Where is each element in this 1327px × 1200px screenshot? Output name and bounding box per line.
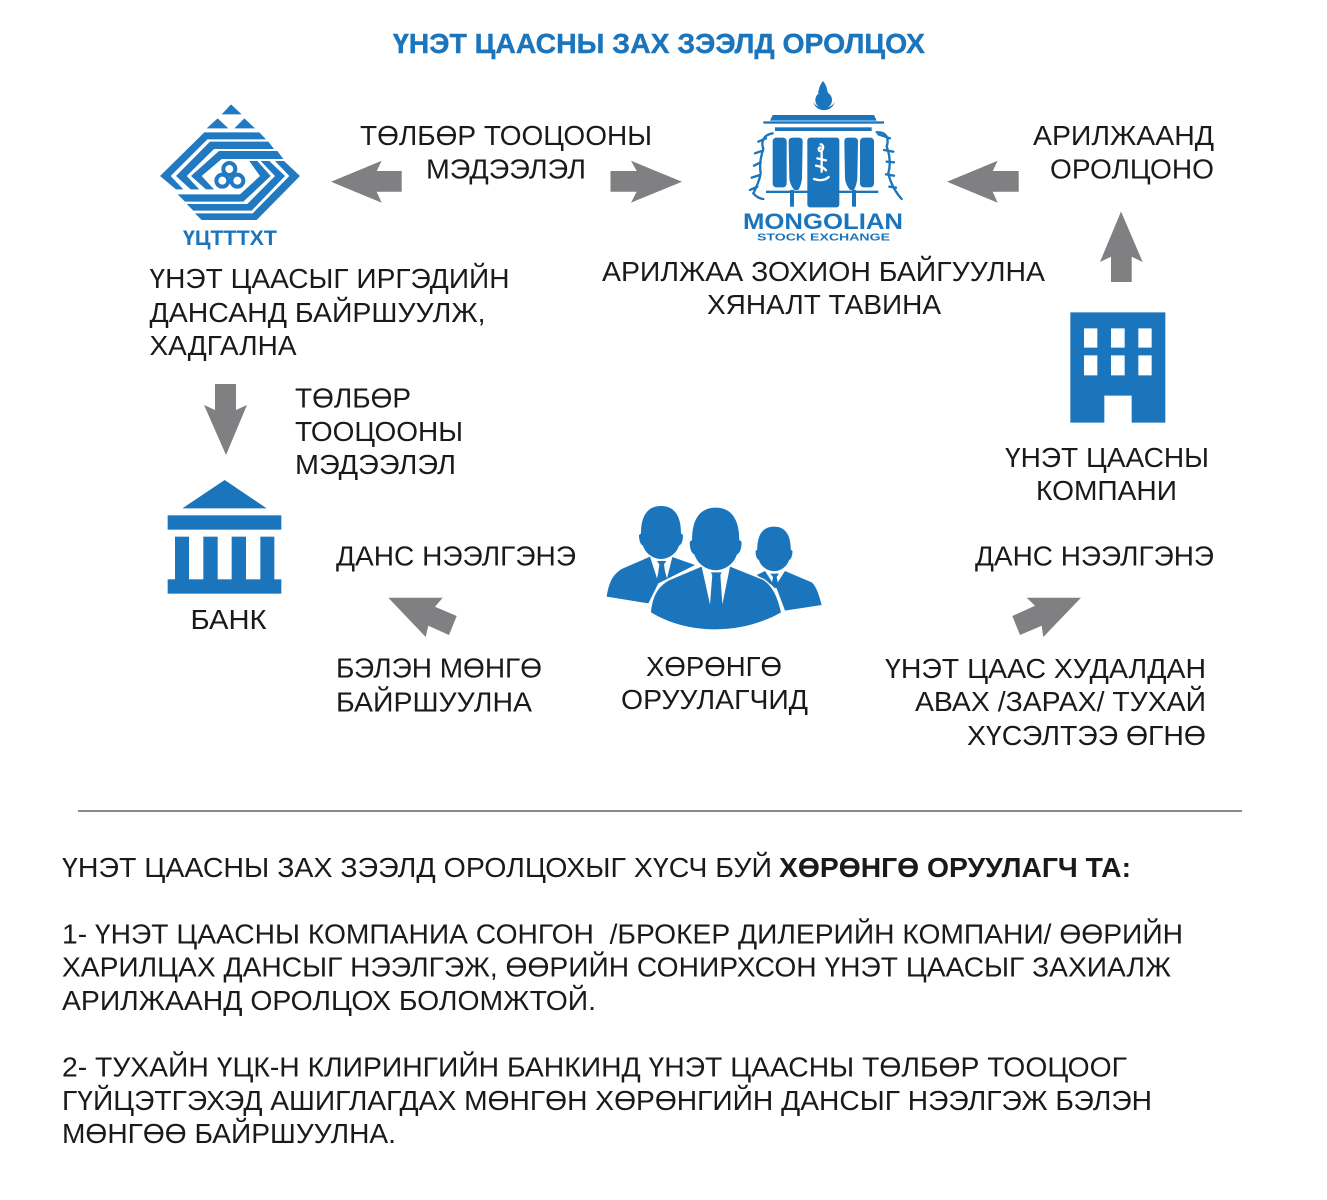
text: participates in trading: ОРОЛЦОНО <box>1050 154 1214 184</box>
label: investors: ХӨРӨНГӨ <box>646 651 782 682</box>
text: deposit cash <box>336 652 542 718</box>
text: open account right: ДАНС НЭЭЛГЭНЭ <box>975 540 1214 572</box>
icon: Mongolian Stock Exchange logo <box>743 81 903 244</box>
icon: Mongolian Stock Exchange logo: STOCK EXCHANGE <box>757 232 890 244</box>
text: depository description <box>150 263 510 361</box>
text: depository description: ДАНСАНД БАЙРШУУЛЖ, <box>150 297 486 328</box>
label: bank: БАНК <box>190 604 267 635</box>
icon: investors group <box>607 506 822 629</box>
text: payment information top: МЭДЭЭЛЭЛ <box>426 154 586 184</box>
text: payment information left: МЭДЭЭЛЭЛ <box>295 449 456 480</box>
icon: bank <box>168 480 281 594</box>
text: step 1: 1- ҮНЭТ ЦААСНЫ КОМПАНИА СОНГОН /БРОКЕР ДИЛЕРИЙН КОМПАНИ/ ӨӨРИЙН <box>62 918 1183 950</box>
text: securities company label: КОМПАНИ <box>1036 475 1177 506</box>
arrow: investors to securities company <box>1012 598 1081 637</box>
text: submit order: ҮНЭТ ЦААС ХУДАЛДАН <box>885 653 1206 684</box>
text: payment information left <box>295 382 463 480</box>
text: payment information left: ТӨЛБӨР <box>295 382 411 414</box>
text: stock exchange description: ХЯНАЛТ ТАВИНА <box>707 289 941 320</box>
label: investors <box>621 651 808 715</box>
arrow: up to trading <box>1100 212 1143 282</box>
text: step 2: 2- ТУХАЙН ҮЦК-Н КЛИРИНГИЙН БАНКИНД ҮНЭТ ЦААСНЫ ТӨЛБӨР ТООЦООГ <box>62 1052 1127 1082</box>
text: participates in trading: АРИЛЖААНД <box>1033 120 1214 151</box>
arrow: left to depository <box>331 161 402 203</box>
text: submit order: АВАХ /ЗАРАХ/ ТУХАЙ <box>915 686 1206 717</box>
text: investor intro: ХӨРӨНГӨ ОРУУЛАГЧ ТА: <box>779 852 1131 883</box>
title: ҮНЭТ ЦААСНЫ ЗАХ ЗЭЭЛД ОРОЛЦОХ <box>393 28 925 59</box>
text: securities company label <box>1005 442 1209 506</box>
text: payment information top <box>360 120 652 184</box>
arrow: right to stock exchange <box>610 161 682 203</box>
text: open account left: ДАНС НЭЭЛГЭНЭ <box>336 540 576 572</box>
icon: securities company building <box>1070 312 1165 423</box>
text: stock exchange description <box>602 256 1045 320</box>
text: deposit cash: БЭЛЭН МӨНГӨ <box>336 652 542 684</box>
text: stock exchange description: АРИЛЖАА ЗОХИОН БАЙГУУЛНА <box>602 256 1045 287</box>
icon: ҮЦТТТХТ depository logo <box>160 104 300 250</box>
text: investor intro: ҮНЭТ ЦААСНЫ ЗАХ ЗЭЭЛД ОРОЛЦОХЫГ ХҮСЧ БУЙ <box>62 852 772 883</box>
text: step 1: ХАРИЛЦАХ ДАНСЫГ НЭЭЛГЭЖ, ӨӨРИЙН СОНИРХСОН ҮНЭТ ЦААСЫГ ЗАХИАЛЖ <box>62 952 1171 982</box>
text: participates in trading <box>1033 120 1214 184</box>
text: step 2: ГҮЙЦЭТГЭХЭД АШИГЛАГДАХ МӨНГӨН ХӨРӨНГИЙН ДАНСЫГ НЭЭЛГЭЖ БЭЛЭН <box>62 1085 1152 1116</box>
text: depository description: ХАДГАЛНА <box>150 330 297 361</box>
arrow: down to bank <box>204 384 247 455</box>
text: deposit cash: БАЙРШУУЛНА <box>336 686 532 718</box>
text: submit order <box>885 653 1206 751</box>
text: payment information top: ТӨЛБӨР ТООЦООНЫ <box>360 120 652 151</box>
icon: Mongolian Stock Exchange logo: MONGOLIAN <box>743 209 903 234</box>
text: depository description: ҮНЭТ ЦААСЫГ ИРГЭДИЙН <box>150 263 510 294</box>
text: step 2: МӨНГӨӨ БАЙРШУУЛНА. <box>62 1118 396 1149</box>
text: securities company label: ҮНЭТ ЦААСНЫ <box>1005 442 1209 473</box>
text: step 1 <box>62 918 1183 1016</box>
text: payment information left: ТООЦООНЫ <box>295 416 463 447</box>
icon: ҮЦТТТХТ depository logo: ҮЦТТТХТ <box>183 227 277 250</box>
arrow: left to stock exchange <box>947 161 1019 203</box>
arrow: investors to bank <box>388 598 457 637</box>
label: investors: ОРУУЛАГЧИД <box>621 684 808 715</box>
text: submit order: ХҮСЭЛТЭЭ ӨГНӨ <box>967 720 1206 751</box>
text: investor intro <box>62 852 1131 883</box>
text: step 2 <box>62 1052 1152 1149</box>
text: step 1: АРИЛЖААНД ОРОЛЦОХ БОЛОМЖТОЙ. <box>62 985 596 1016</box>
